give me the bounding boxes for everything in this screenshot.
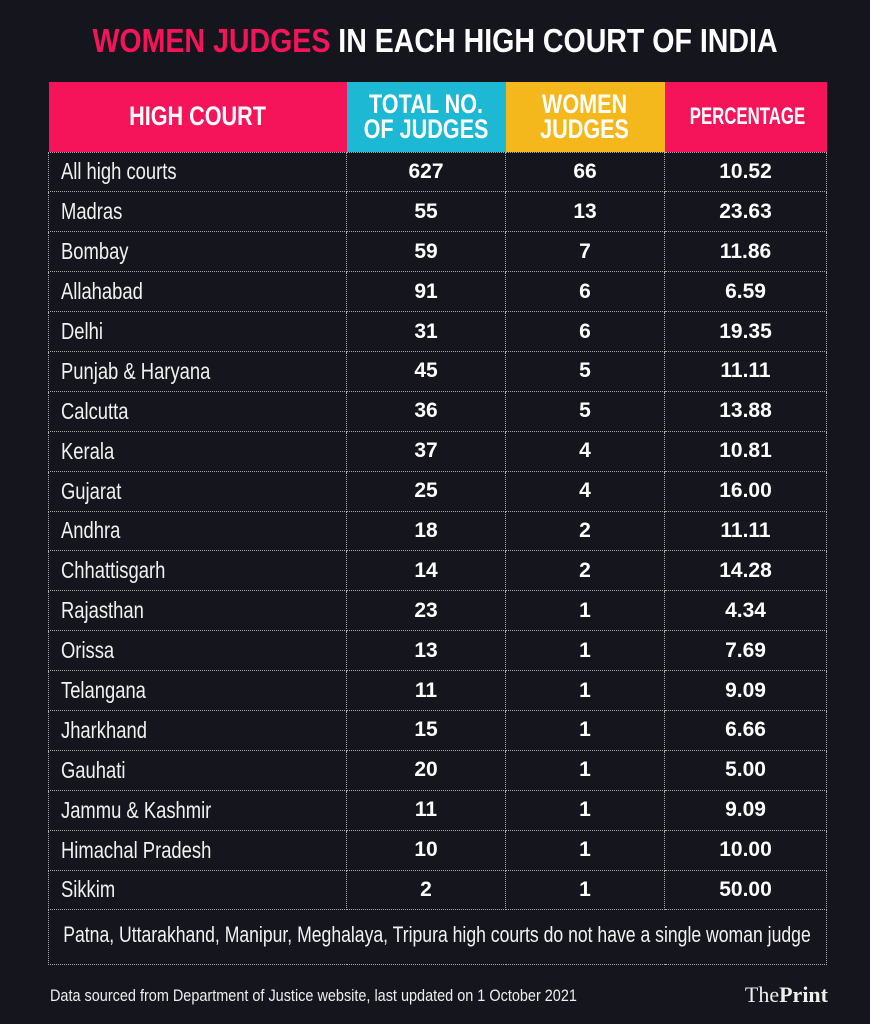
table: WOMEN: [542, 89, 628, 119]
table: 15: [414, 718, 438, 741]
table: TOTAL NO.: [369, 89, 483, 119]
table: 20: [414, 758, 438, 781]
table: 36: [414, 399, 438, 422]
table: JUDGES: [541, 114, 629, 144]
table: 627: [408, 160, 444, 183]
table: 59: [414, 240, 438, 263]
logo: ThePrint: [745, 982, 828, 1007]
table: All high courts: [61, 158, 177, 184]
table: 2: [579, 559, 591, 582]
table: 66: [573, 160, 597, 183]
table: Chhattisgarh: [61, 557, 165, 583]
table: 10: [414, 838, 438, 861]
table: 1: [579, 758, 591, 781]
table: Jharkhand: [61, 717, 147, 743]
table: 5: [579, 359, 591, 382]
table: 11: [415, 798, 437, 821]
table: 14: [414, 559, 438, 582]
table: 7.69: [725, 639, 766, 662]
table: 55: [414, 200, 438, 223]
table: 14.28: [719, 559, 772, 582]
table: OF JUDGES: [364, 114, 488, 144]
table: Telangana: [61, 677, 146, 703]
table: Madras: [61, 198, 122, 224]
table: 5.00: [725, 758, 766, 781]
table: 11: [415, 679, 437, 702]
table: 5: [579, 399, 591, 422]
table: 1: [579, 718, 591, 741]
table: 4: [579, 479, 591, 502]
table: 16.00: [719, 479, 772, 502]
table: Calcutta: [61, 398, 128, 424]
table: 23: [414, 599, 438, 622]
table: 6: [579, 320, 591, 342]
table: 6.66: [725, 718, 766, 741]
table: 25: [414, 479, 438, 502]
table: 1: [579, 798, 591, 821]
table: 4.34: [725, 599, 766, 622]
table: 10.00: [719, 838, 772, 861]
table: 9.09: [725, 798, 766, 821]
table: 91: [414, 280, 438, 303]
table: 13: [414, 639, 438, 662]
table: Allahabad: [61, 278, 143, 304]
table: 1: [579, 679, 591, 702]
table: 37: [414, 439, 438, 462]
table: 6: [579, 280, 591, 303]
table: 2: [420, 878, 432, 901]
table: 4: [579, 439, 591, 462]
table: 6.59: [725, 280, 766, 303]
table: 2: [579, 519, 591, 542]
table: Delhi: [61, 318, 103, 344]
table: HIGH COURT: [129, 101, 266, 131]
table: 1: [579, 878, 591, 901]
table: 1: [579, 599, 591, 622]
table: 13: [573, 200, 597, 223]
table: 11.11: [720, 519, 771, 542]
table: 11.11: [720, 359, 771, 382]
title: WOMEN JUDGES IN EACH HIGH COURT OF INDIA: [92, 22, 778, 59]
table: Sikkim: [61, 876, 115, 902]
table: Orissa: [61, 637, 114, 663]
table: Rajasthan: [61, 597, 144, 623]
table: [48, 82, 827, 965]
source note: Data sourced from Department of Justice website, last updated on 1 October 2021: [50, 986, 577, 1005]
footnote: Patna, Uttarakhand, Manipur, Meghalaya, Tripura high courts do not have a single woman judge: [63, 922, 811, 947]
table: Kerala: [61, 438, 114, 464]
table: Jammu & Kashmir: [61, 797, 211, 823]
table: Gauhati: [61, 757, 125, 783]
table: PERCENTAGE: [689, 103, 805, 130]
table: 23.63: [719, 200, 772, 223]
table: 11.86: [720, 240, 771, 263]
table: 1: [579, 838, 591, 861]
table: 10.52: [719, 160, 772, 183]
table: Andhra: [61, 517, 120, 543]
table: 13.88: [719, 399, 772, 422]
table: 7: [579, 240, 591, 263]
table: Gujarat: [61, 478, 121, 504]
table: 10.81: [719, 439, 772, 462]
table: Punjab & Haryana: [61, 358, 210, 384]
table: Himachal Pradesh: [61, 837, 211, 863]
table: 1: [579, 639, 591, 662]
table: 19.35: [719, 320, 772, 342]
table: 45: [414, 359, 438, 382]
table: 31: [414, 320, 438, 342]
table: 9.09: [725, 679, 766, 702]
table: 50.00: [719, 878, 772, 901]
table: 18: [414, 519, 438, 542]
table: Bombay: [61, 238, 128, 264]
